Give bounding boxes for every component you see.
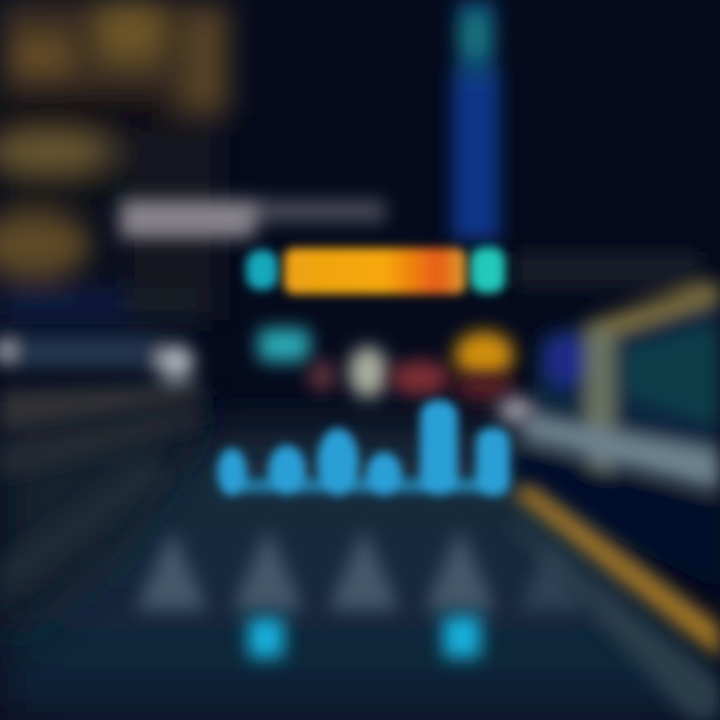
icon: dark red base — [454, 374, 514, 402]
icon: red shape left — [308, 360, 336, 392]
icon: pale right shape — [498, 396, 534, 424]
stripe: pale platform edge — [505, 520, 720, 720]
triangle icon 1 — [136, 530, 208, 610]
banner fill — [284, 248, 466, 294]
marker 2 — [443, 616, 481, 658]
triangle icon 4 — [424, 528, 496, 610]
train: right side — [510, 252, 720, 590]
left ground wedge — [0, 400, 210, 640]
icon: orange-yellow circle — [454, 331, 514, 379]
stripe: orange platform edge — [510, 484, 720, 660]
markers: cyan squares — [248, 616, 481, 658]
triangle icon 3 — [328, 528, 400, 610]
icon: white shape — [348, 346, 388, 398]
railing: left side — [0, 335, 205, 605]
bar chart: blue bars — [217, 400, 510, 496]
icon: small cyan block — [258, 328, 310, 362]
banner: orange title bar — [246, 247, 506, 294]
building: top left — [0, 0, 232, 324]
marker 1 — [248, 618, 284, 658]
icon: red shape — [390, 360, 450, 396]
heading: blurred title — [120, 200, 385, 238]
banner cyan end caps — [246, 247, 506, 293]
center objects: small icons — [258, 328, 534, 424]
floor platform — [0, 430, 720, 720]
triangle icon 2 — [232, 528, 304, 610]
triangle icon 5 — [518, 545, 584, 610]
icons row: gray triangles — [136, 528, 584, 610]
tower: blue spire — [452, 0, 500, 240]
